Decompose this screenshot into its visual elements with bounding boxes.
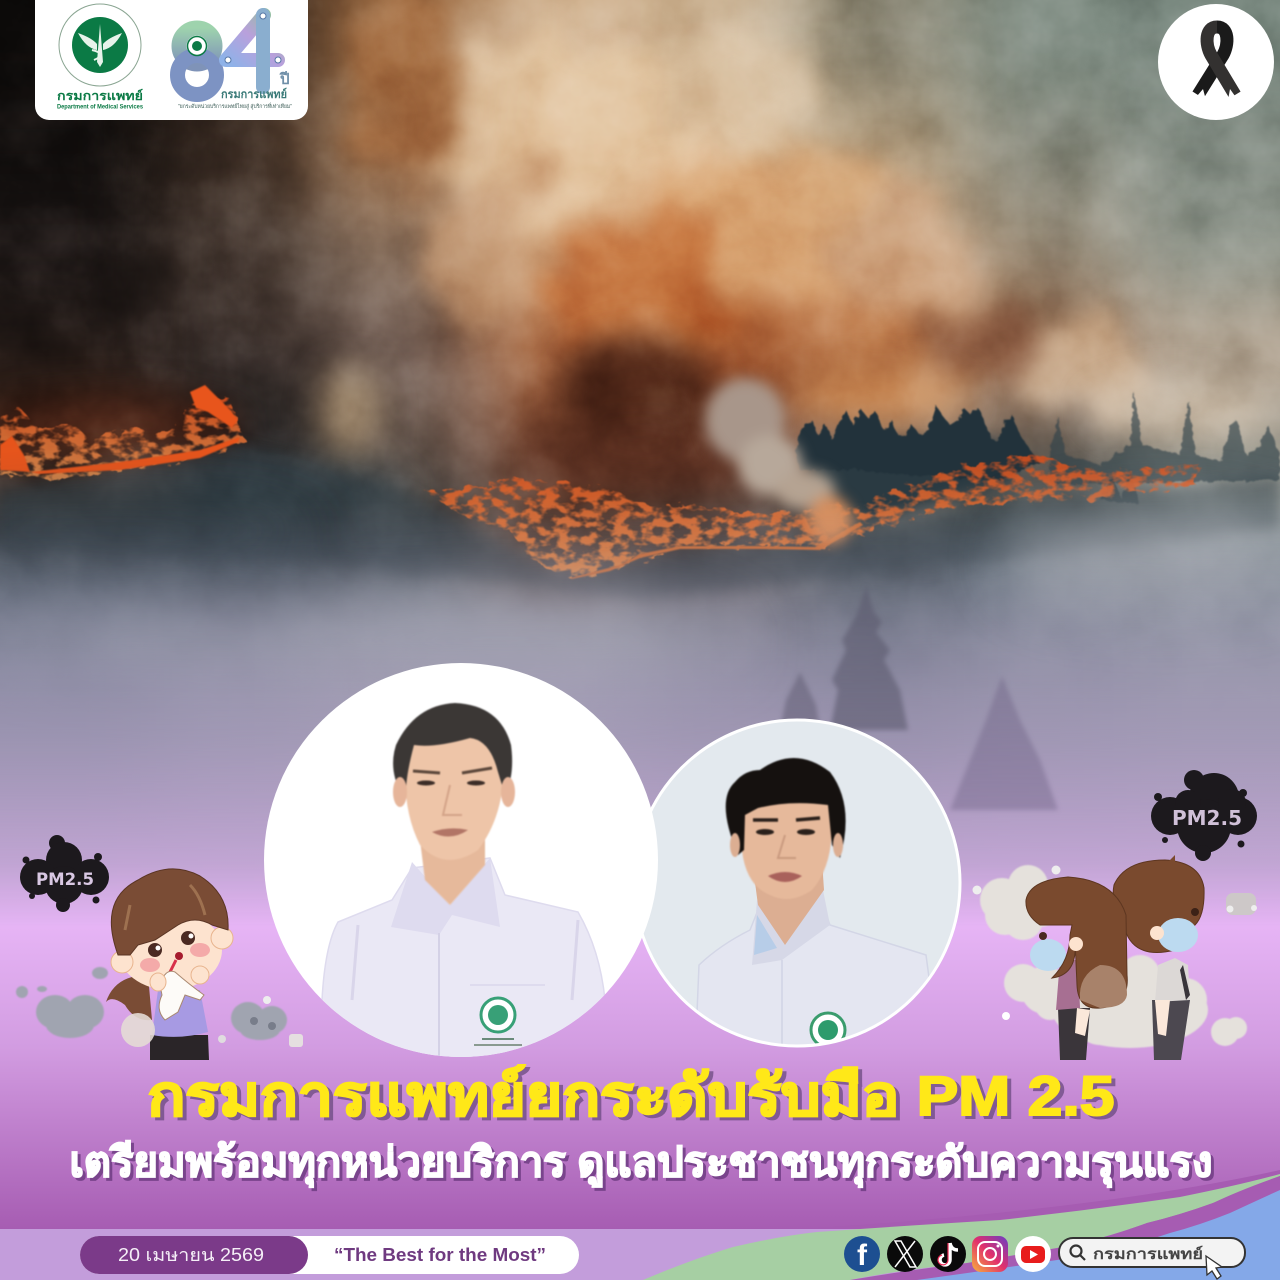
tissue and hands xyxy=(159,971,204,1020)
logo: Ministry of Public Health: กรมการแพทย์ xyxy=(57,88,143,103)
icon: cursor xyxy=(1206,1256,1222,1279)
search bar xyxy=(1059,1238,1245,1279)
head and hair xyxy=(393,703,515,905)
decorative wave: purple xyxy=(850,1176,1280,1280)
mist xyxy=(0,500,1280,680)
icon: tiktok xyxy=(930,1236,966,1272)
background: wildfire smoke photo xyxy=(0,0,1280,860)
ponytail xyxy=(106,975,152,1020)
icon: facebook: f xyxy=(857,1239,868,1272)
portrait: right doctor xyxy=(635,721,959,1060)
icon: PM2.5 cloud left xyxy=(20,835,109,912)
icon: instagram xyxy=(972,1236,1008,1272)
slogan: “The Best for the Most” xyxy=(334,1245,546,1265)
icon: PM2.5 cloud left: PM2.5 xyxy=(36,870,94,890)
logo: 84 years: กรมการแพทย์ xyxy=(221,87,287,101)
icon: magnifier xyxy=(1070,1246,1085,1260)
decorative wave: green xyxy=(643,1174,1280,1280)
icon: PM2.5 cloud right xyxy=(1151,770,1257,861)
character: girl with nosebleed xyxy=(16,869,303,1060)
distant pine trees in the mist xyxy=(780,586,1058,810)
decorative wave: purple backdrop xyxy=(800,1170,1280,1229)
smoke puffs xyxy=(980,865,1247,1048)
face xyxy=(148,943,162,957)
hill ridges and tree lines xyxy=(0,392,1280,600)
outline right portrait xyxy=(634,720,960,1046)
man xyxy=(1152,1000,1190,1060)
search bar: กรมการแพทย์ xyxy=(1093,1245,1203,1263)
social icons xyxy=(844,1236,1051,1272)
date pill: 20 เมษายน 2569 xyxy=(118,1245,264,1265)
head and hair xyxy=(726,758,846,899)
icon: youtube xyxy=(1015,1236,1051,1272)
logo: 84 years: "ยกระดับหน่วยบริการแพทย์ไทยสู่ สู่บริการที่เท่าเทียม" xyxy=(178,102,292,110)
title: กรมการแพทย์ยกระดับรับมือ PM 2.5 xyxy=(148,1064,1114,1127)
flames: centre ridge xyxy=(420,455,1200,578)
hair xyxy=(111,869,228,955)
date and slogan pill xyxy=(80,1236,579,1274)
head xyxy=(118,910,222,990)
icon: PM2.5 cloud right: PM2.5 xyxy=(1172,806,1242,830)
tree line: right ridge xyxy=(795,405,1040,480)
logo: 84 years xyxy=(178,13,292,110)
title: กรมการแพทย์ยกระดับรับมือ PM 2.5 xyxy=(152,1067,1118,1130)
body xyxy=(150,1035,209,1060)
icon: facebook xyxy=(844,1236,880,1272)
icon: black mourning ribbon xyxy=(1158,4,1274,120)
logo: Ministry of Public Health: Department of Medical Services xyxy=(57,104,144,110)
shirt xyxy=(696,914,930,1010)
neck xyxy=(755,872,824,945)
subtitle: เตรียมพร้อมทุกหน่วยบริการ ดูแลประชาชนทุกระดับความรุนแรง xyxy=(70,1139,1212,1188)
decorative wave: blue xyxy=(917,1190,1280,1280)
logo panel xyxy=(35,0,308,120)
lilac gradient ground xyxy=(0,500,1280,1230)
icon: X xyxy=(887,1236,923,1272)
smoke column xyxy=(705,378,852,544)
flames: left ridge xyxy=(0,395,244,478)
woman xyxy=(1058,1008,1090,1060)
footer bar xyxy=(0,1170,1280,1280)
logo: Ministry of Public Health xyxy=(57,4,144,110)
date pill xyxy=(80,1236,308,1274)
dust clouds xyxy=(16,967,287,1040)
portrait: left doctor xyxy=(264,663,658,1070)
logo: 84 years: ปี xyxy=(279,71,290,88)
shirt xyxy=(322,858,610,1070)
badge xyxy=(811,1013,845,1047)
badge xyxy=(481,998,515,1032)
subtitle: เตรียมพร้อมทุกหน่วยบริการ ดูแลประชาชนทุกระดับความรุนแรง xyxy=(72,1142,1216,1191)
wildfire flames xyxy=(0,395,1200,578)
character: masked couple xyxy=(972,855,1257,1060)
texture of billowing smoke xyxy=(0,0,1280,608)
